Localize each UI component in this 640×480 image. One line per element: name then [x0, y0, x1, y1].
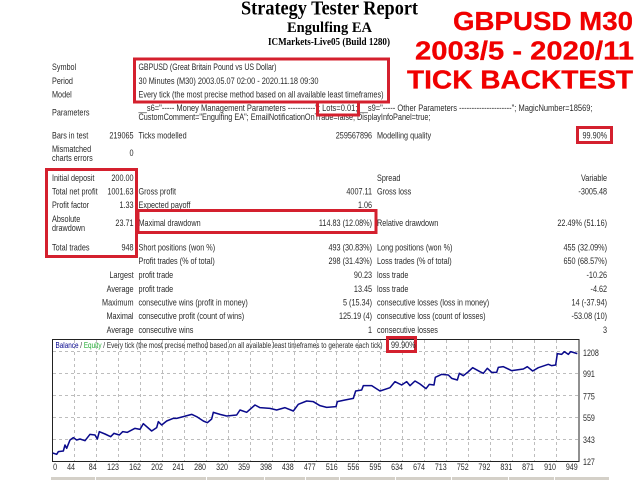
y axis labels: 343	[583, 435, 595, 445]
parameters row	[52, 103, 592, 122]
x axis labels: 280	[194, 462, 206, 472]
y axis labels	[583, 348, 599, 467]
spread and profit statistics table: 650 (68.57%)	[563, 255, 607, 266]
red headline: pair, dates, backtest: TICK BACKTEST	[407, 66, 633, 94]
x axis labels: 477	[304, 462, 316, 472]
left summary column: 23.71	[115, 217, 134, 228]
symbol, period and model rows: Symbol	[52, 61, 76, 72]
spread and profit statistics table: Spread	[377, 172, 401, 183]
spread and profit statistics table: Maximal drawdown	[139, 217, 201, 228]
spread and profit statistics table: 298 (31.43%)	[328, 255, 372, 266]
bars, ticks and modelling quality row	[52, 130, 608, 141]
spread and profit statistics table	[102, 172, 607, 335]
parameters row: Parameters	[52, 107, 90, 118]
x axis labels: 398	[260, 462, 272, 472]
spread and profit statistics table: consecutive losses (loss in money)	[377, 297, 489, 308]
spread and profit statistics table: profit trade	[139, 283, 174, 294]
spread and profit statistics table: consecutive wins (profit in money)	[139, 297, 248, 308]
spread and profit statistics table: loss trade	[377, 283, 409, 294]
mismatched charts errors row	[52, 143, 134, 163]
left summary column	[52, 172, 134, 253]
spread and profit statistics table: Gross loss	[377, 186, 411, 197]
left summary column: Total net profit	[52, 186, 98, 197]
bars, ticks and modelling quality row: Bars in test	[52, 130, 89, 141]
report title block: ICMarkets-Live05 (Build 1280)	[268, 37, 390, 48]
spread and profit statistics table: 4007.11	[346, 186, 372, 197]
symbol, period and model rows: 30 Minutes (M30) 2003.05.07 02:00 - 2020.11.18 09:30	[138, 76, 318, 86]
left summary column: 948	[121, 242, 134, 253]
spread and profit statistics table: Maximum	[102, 297, 134, 308]
spread and profit statistics table: consecutive profit (count of wins)	[139, 310, 244, 321]
bars, ticks and modelling quality row: Modelling quality	[377, 130, 432, 141]
left summary column: Initial deposit	[52, 172, 95, 183]
x axis labels: 0	[53, 462, 57, 472]
bars, ticks and modelling quality row: 219065	[109, 130, 134, 141]
spread and profit statistics table: 90.23	[354, 269, 372, 280]
spread and profit statistics table: Maximal	[106, 310, 134, 321]
x axis labels: 752	[457, 462, 469, 472]
x axis labels: 202	[151, 462, 163, 472]
x axis labels: 792	[478, 462, 491, 472]
x axis labels: 871	[522, 462, 534, 472]
spread and profit statistics table: 125.19 (4)	[339, 310, 372, 321]
y axis labels: 559	[583, 413, 595, 423]
spread and profit statistics table: Gross profit	[139, 186, 177, 197]
spread and profit statistics table: consecutive loss (count of losses)	[377, 310, 486, 321]
spread and profit statistics table: -10.26	[587, 269, 607, 280]
spread and profit statistics table: 455 (32.09%)	[563, 242, 607, 253]
red headline: pair, dates, backtest	[407, 8, 634, 94]
report title block: Engulfing EA	[287, 20, 372, 36]
spread and profit statistics table: Loss trades (% of total)	[377, 255, 452, 266]
y axis labels: 127	[583, 457, 595, 467]
symbol, period and model rows: Period	[52, 75, 73, 86]
left summary column: Absolute	[52, 213, 81, 224]
spread and profit statistics table: Average	[107, 283, 134, 294]
grey footer tabs	[51, 477, 609, 480]
spread and profit statistics table: Largest	[109, 269, 134, 280]
mismatched charts errors row: Mismatched	[52, 143, 91, 154]
spread and profit statistics table: 13.45	[354, 283, 372, 294]
spread and profit statistics table: 3	[603, 324, 607, 335]
x axis labels: 162	[129, 462, 141, 472]
symbol, period and model rows: GBPUSD (Great Britain Pound vs US Dollar)	[138, 62, 276, 72]
x axis labels: 595	[369, 462, 382, 472]
mismatched charts errors row: 0	[130, 147, 134, 158]
spread and profit statistics table: -3005.48	[578, 186, 607, 197]
red headline: pair, dates, backtest: 2003/5 - 2020/11	[415, 37, 634, 65]
spread and profit statistics table: consecutive wins	[139, 324, 193, 335]
left summary column: 1001.63	[107, 186, 134, 197]
spread and profit statistics table: consecutive losses	[377, 324, 438, 335]
bars, ticks and modelling quality row: 99.90%	[583, 130, 608, 141]
x axis labels: 556	[347, 462, 360, 472]
spread and profit statistics table: profit trade	[139, 269, 174, 280]
x axis labels: 831	[500, 462, 513, 472]
left summary column: Profit factor	[52, 199, 89, 210]
x axis labels: 84	[89, 462, 97, 472]
left summary column: drawdown	[52, 222, 85, 233]
spread and profit statistics table: 1	[368, 324, 372, 335]
red headline: pair, dates, backtest: GBPUSD M30	[453, 8, 633, 36]
left summary column: 1.33	[119, 199, 134, 210]
spread and profit statistics table: 22.49% (51.16)	[557, 217, 607, 228]
balance line	[53, 352, 577, 454]
y axis labels: 1208	[583, 348, 599, 358]
report title block	[241, 0, 418, 48]
spread and profit statistics table: 493 (30.83%)	[328, 242, 372, 253]
bars, ticks and modelling quality row: Ticks modelled	[139, 130, 187, 141]
symbol, period and model rows	[52, 61, 384, 100]
spread and profit statistics table: loss trade	[377, 269, 409, 280]
chart quality badge	[388, 338, 416, 352]
x axis labels: 320	[216, 462, 228, 472]
spread and profit statistics table: Profit trades (% of total)	[139, 255, 215, 266]
y axis labels: 775	[583, 392, 595, 402]
x axis labels: 674	[413, 462, 425, 472]
spread and profit statistics table: -53.08 (10)	[572, 310, 607, 321]
spread and profit statistics table: Long positions (won %)	[377, 242, 453, 253]
x axis labels: 949	[566, 462, 578, 472]
parameters row: CustomComment="Engulfing EA"; EmailNotificationOnTrade=false; DisplayInfoPanel=true;	[138, 112, 430, 122]
x axis labels	[53, 462, 578, 472]
chart quality badge: 99.90%	[391, 339, 416, 350]
symbol, period and model rows: Every tick (the most precise method based on all available least timeframes)	[138, 90, 384, 100]
spread and profit statistics table: Variable	[581, 172, 607, 183]
x axis labels: 438	[282, 462, 294, 472]
chart caption: Balance / Equity / Every tick (the most precise method based on all available least timeframes to generate each tick)	[56, 340, 383, 350]
balance equity chart	[52, 338, 599, 472]
y axis labels: 991	[583, 369, 595, 379]
x axis labels: 123	[107, 462, 119, 472]
x axis labels: 516	[326, 462, 338, 472]
spread and profit statistics table: Average	[107, 324, 134, 335]
spread and profit statistics table: Relative drawdown	[377, 217, 439, 228]
x axis labels: 634	[391, 462, 403, 472]
spread and profit statistics table: Short positions (won %)	[139, 242, 215, 253]
left summary column: 200.00	[111, 172, 134, 183]
spread and profit statistics table: 1.06	[358, 199, 372, 210]
spread and profit statistics table: 5 (15.34)	[343, 297, 372, 308]
mismatched charts errors row: charts errors	[52, 152, 93, 163]
x axis labels: 910	[544, 462, 556, 472]
x axis labels: 713	[435, 462, 447, 472]
x axis labels: 359	[238, 462, 250, 472]
spread and profit statistics table: Expected payoff	[139, 199, 191, 210]
spread and profit statistics table: -4.62	[591, 283, 607, 294]
spread and profit statistics table: 14 (-37.94)	[572, 297, 607, 308]
red highlight boxes	[46, 59, 612, 256]
bars, ticks and modelling quality row: 259567896	[336, 130, 372, 141]
symbol, period and model rows: Model	[52, 89, 72, 100]
x axis labels: 241	[172, 462, 185, 472]
x axis labels: 44	[67, 462, 75, 472]
spread and profit statistics table: 114.83 (12.08%)	[319, 217, 372, 228]
left summary column: Total trades	[52, 242, 90, 253]
